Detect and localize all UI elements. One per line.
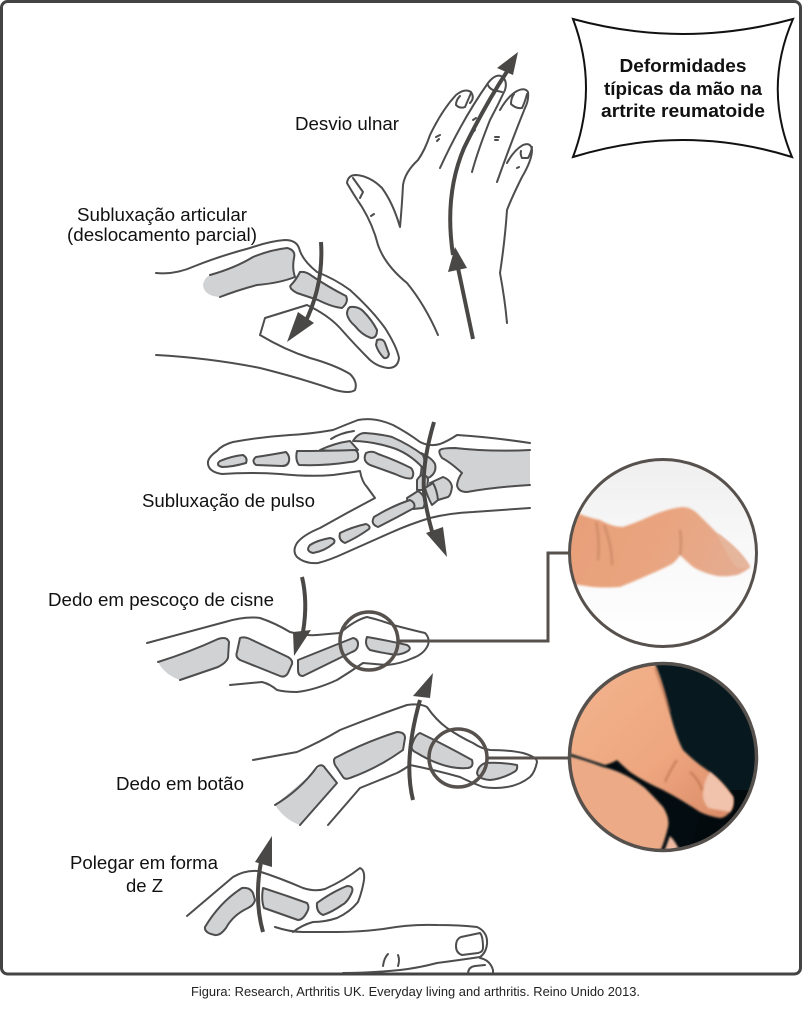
illustration: joint subluxation finger	[156, 240, 399, 392]
title banner: artrite reumatoide	[601, 100, 765, 121]
thumbnail	[456, 933, 483, 955]
label: subluxacao articular	[67, 204, 257, 245]
arrow: wrist subluxation	[424, 422, 447, 557]
source caption: Figura: Research, Arthritis UK. Everyday living and arthritis. Reino Unido 2013.	[191, 985, 640, 999]
label: subluxacao articular: (deslocamento parcial)	[67, 224, 257, 245]
arrow: ulnar deviation	[448, 52, 518, 339]
knuckle creases	[371, 118, 519, 216]
label: polegar em forma de Z: de Z	[126, 875, 163, 896]
illustration: Z thumb	[187, 836, 493, 976]
bones	[158, 638, 228, 680]
illustration: swan neck finger	[147, 553, 572, 692]
arrow: swan neck	[293, 577, 311, 656]
title banner: Deformidades	[620, 55, 746, 76]
title banner: típicas da mão na	[604, 78, 763, 99]
title banner	[573, 19, 793, 157]
bones	[205, 888, 255, 935]
label: desvio ulnar: Desvio ulnar	[295, 113, 399, 134]
highlight circle	[340, 612, 398, 670]
arrow: Z thumb	[255, 836, 272, 932]
bones	[203, 248, 295, 297]
illustration: boutonniere finger	[253, 673, 572, 825]
illustration: wrist subluxation	[208, 419, 530, 563]
connector to photo	[487, 756, 572, 760]
connector to photo	[398, 553, 572, 641]
label: dedo em pescoco de cisne: Dedo em pescoço de cisne	[48, 589, 274, 610]
photo: boutonniere finger	[565, 664, 756, 852]
label: polegar em forma de Z	[70, 852, 219, 896]
label: subluxacao articular: Subluxação articular	[77, 204, 247, 225]
label: subluxacao de pulso: Subluxação de pulso	[142, 490, 315, 511]
arrow: subluxation	[287, 242, 321, 342]
fingernails	[353, 85, 532, 198]
arrow: boutonniere	[409, 673, 433, 800]
label: polegar em forma de Z: Polegar em forma	[70, 852, 219, 873]
illustration: hand with ulnar deviation	[347, 52, 532, 339]
highlight circle	[429, 729, 487, 787]
bones	[439, 448, 530, 492]
bones	[334, 732, 405, 779]
label: dedo em botao: Dedo em botão	[116, 773, 244, 794]
photo: swan neck finger	[565, 460, 756, 646]
